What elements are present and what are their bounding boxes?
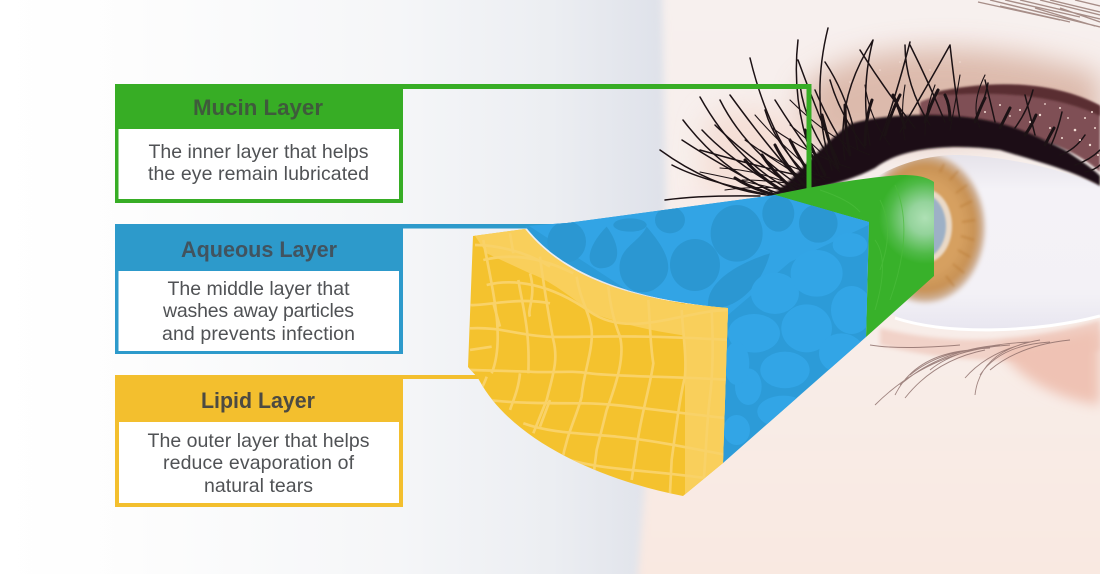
skin	[636, 0, 1100, 574]
text: mucin description: the eye remain lubricated	[148, 163, 369, 185]
panel: lipid layer	[115, 375, 403, 507]
text: aqueous description: The middle layer that	[168, 278, 350, 300]
heading: lipid: Lipid Layer	[201, 388, 315, 413]
text: aqueous description: and prevents infection	[162, 323, 355, 345]
eyelid shadow	[700, 48, 1100, 195]
connector: lipid line	[403, 375, 481, 379]
text: aqueous description	[162, 278, 355, 345]
lower lashes	[870, 340, 1070, 405]
eye white	[860, 155, 1100, 329]
text: mucin description	[148, 141, 369, 185]
eyebrow	[978, 0, 1100, 27]
text: aqueous description: washes away particles	[162, 300, 354, 322]
text: mucin description: The inner layer that helps	[148, 141, 369, 163]
connector: aqueous line	[403, 224, 568, 228]
diagram: tear film layers	[468, 175, 934, 503]
connector: mucin line	[403, 86, 809, 190]
aqueous wedge	[520, 190, 875, 463]
heading: aqueous: Aqueous Layer	[181, 237, 337, 262]
pupil ring	[934, 190, 954, 262]
lower lid	[880, 320, 1100, 405]
text: lipid description: The outer layer that helps	[148, 430, 370, 452]
lipid wedge	[468, 227, 730, 503]
lid speckles	[849, 61, 1099, 156]
lashes outer fan	[660, 28, 1100, 200]
iris	[864, 152, 986, 304]
photo: eye close-up	[636, 0, 1100, 574]
text: lipid description: reduce evaporation of	[163, 452, 355, 474]
upper lash base	[770, 115, 1100, 196]
panel: aqueous layer	[115, 224, 403, 354]
text: lipid description: natural tears	[204, 475, 313, 497]
lid rim	[895, 316, 1100, 330]
panel: mucin layer	[115, 84, 403, 203]
mucin wedge	[773, 175, 934, 337]
heading: mucin: Mucin Layer	[193, 95, 323, 120]
text: lipid description	[148, 430, 370, 497]
